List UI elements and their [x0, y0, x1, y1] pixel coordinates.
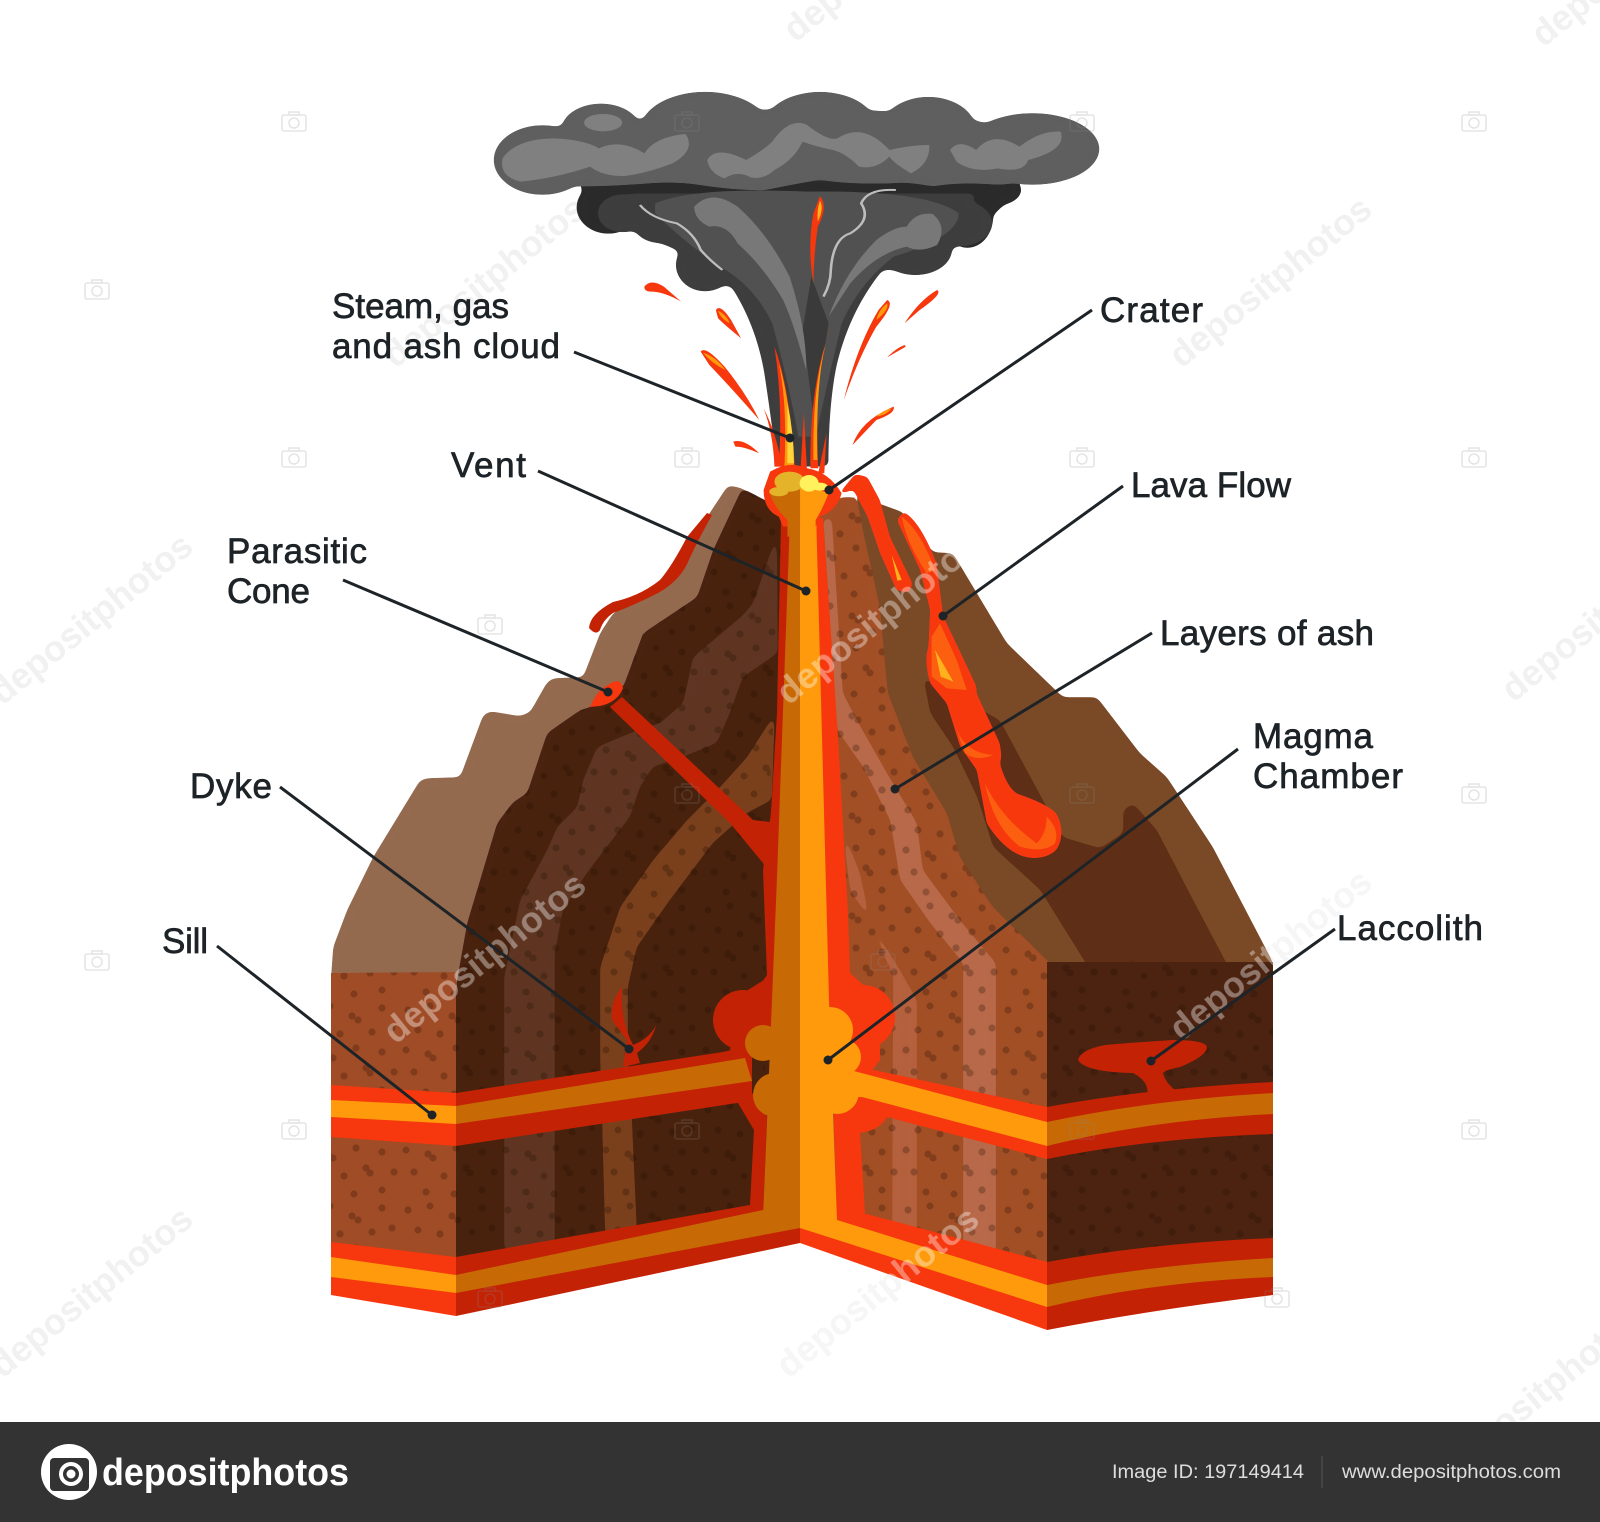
right block lower core [1047, 1258, 1273, 1307]
watermarks over artwork: depositphotos [1161, 860, 1379, 1048]
right red wall [816, 518, 880, 1100]
left red wall [760, 510, 790, 1110]
label: layers of ash: Layers of ash [1160, 614, 1374, 653]
image id: Image ID: 197149414 [1112, 1462, 1304, 1483]
left magma lobe [713, 990, 773, 1050]
watermarks over artwork: depositphotos [768, 1197, 986, 1385]
label: magma chamber: Magma [1253, 717, 1374, 756]
left outer block [331, 972, 456, 1258]
leader lines [217, 310, 1335, 1120]
left block sill core [331, 1100, 456, 1124]
lava flow leader [938, 486, 1123, 620]
left block lower core [331, 1257, 456, 1293]
vent left half [763, 518, 800, 1228]
texture left [331, 488, 785, 1250]
inner column shade [655, 191, 959, 437]
faint watermarks on background: depositphotos [375, 187, 593, 375]
chamber lobes left [745, 1025, 797, 1117]
faint camera watermarks [85, 112, 1486, 1307]
crater magma clumps [769, 472, 805, 496]
left grey plume [694, 197, 806, 370]
right lower magma [833, 1095, 887, 1222]
left inner sill core [456, 1058, 752, 1124]
left ash layer [504, 533, 778, 1250]
crater leader [824, 310, 1092, 494]
left block lower sill [331, 1242, 456, 1316]
left inner sill red [456, 1045, 752, 1146]
right dark slope shade [923, 677, 1233, 975]
central dark stripe [803, 277, 829, 417]
footer bar [0, 1422, 1600, 1522]
footer logo icon [41, 1444, 97, 1500]
right upper sill core [850, 1070, 1047, 1146]
cloud shadow layer [576, 175, 1022, 248]
dyke branches [612, 987, 656, 1067]
magma chamber leader [824, 749, 1238, 1064]
dyke leader [280, 787, 634, 1054]
chamber lobes right [807, 1007, 861, 1114]
right lower sill core [800, 1215, 1047, 1307]
vent leader [538, 471, 810, 596]
upper stream [833, 474, 913, 593]
vent right half [800, 510, 837, 1228]
right grey plume [829, 214, 942, 317]
sill leader [217, 946, 436, 1120]
faint watermarks on background: depositphotos [768, 1197, 986, 1385]
lava spatter [644, 282, 938, 453]
faint watermarks on background: depositphotos [1161, 860, 1379, 1048]
right outer block [1047, 962, 1273, 1265]
laccolith leader [1146, 929, 1335, 1066]
lava flow [833, 474, 1062, 858]
flow highlights [902, 517, 1056, 849]
faint watermarks on background: depositphotos [1161, 187, 1379, 375]
lava on left slope [589, 513, 712, 633]
right second ash band [842, 827, 917, 1240]
label: steam, gas and ash cloud [332, 287, 560, 366]
watermarks over artwork: depositphotos [768, 524, 986, 712]
eruption cloud and column [493, 92, 1100, 473]
lava strands in the column [764, 327, 831, 473]
steam leader [574, 352, 794, 442]
parasitic cone [590, 681, 623, 707]
laccolith [1078, 1040, 1207, 1095]
right block sill core [1047, 1093, 1273, 1146]
label: magma chamber [1253, 717, 1403, 796]
label: lava flow: Lava Flow [1131, 466, 1292, 505]
left lower ash layer [600, 713, 775, 1235]
right sienna section [816, 497, 1052, 1270]
right lower sill red [800, 1180, 1047, 1330]
right upper sill red [860, 1067, 1047, 1159]
label: parasitic cone: Cone [227, 572, 310, 611]
crater rim [764, 465, 842, 527]
right ash band [823, 518, 996, 1260]
left inner lower sill core [456, 1210, 800, 1293]
label: dyke: Dyke [190, 767, 272, 806]
right magma lobe [831, 985, 895, 1049]
lower cloud and ash column [597, 193, 993, 467]
label: parasitic cone [227, 532, 367, 611]
smoke streaks [640, 205, 722, 270]
label: sill: Sill [162, 922, 208, 961]
parasitic conduit [610, 697, 778, 873]
left inner lower sill red [456, 1205, 800, 1316]
label: magma chamber: Chamber [1253, 757, 1403, 796]
label: laccolith: Laccolith [1337, 909, 1483, 948]
left dark section [450, 488, 790, 1262]
texture right [826, 497, 1273, 1265]
label: vent: Vent [451, 446, 526, 485]
parasitic cone leader [343, 580, 612, 696]
crater bowl left [770, 483, 800, 537]
right brown slope [857, 487, 1273, 985]
upper stream highlight [892, 555, 902, 581]
flow core [935, 650, 953, 682]
spatter highlights [703, 303, 892, 417]
label: parasitic cone: Parasitic [227, 532, 367, 571]
crater [764, 465, 842, 537]
main flow [897, 512, 1062, 858]
label: steam, gas and ash cloud: and ash cloud [332, 327, 560, 366]
left lower magma [738, 1093, 767, 1217]
watermarks over artwork: depositphotos [375, 863, 593, 1051]
right block upper sill [1047, 1082, 1273, 1159]
top cloud layer [493, 92, 1100, 195]
light puffs [502, 114, 1062, 182]
footer brand name: depositphotos [102, 1452, 349, 1494]
lava in the cloud [810, 196, 824, 283]
watermarks over artwork [375, 524, 1379, 1385]
left block upper sill [331, 1085, 456, 1146]
right block lower sill [1047, 1238, 1273, 1330]
left tan outer slope [331, 485, 790, 985]
label: crater: Crater [1100, 291, 1203, 330]
label: steam, gas and ash cloud: Steam, gas [332, 287, 509, 326]
website: www.depositphotos.com [1341, 1462, 1561, 1483]
layers of ash leader [890, 633, 1152, 794]
crater bowl right [800, 483, 829, 537]
